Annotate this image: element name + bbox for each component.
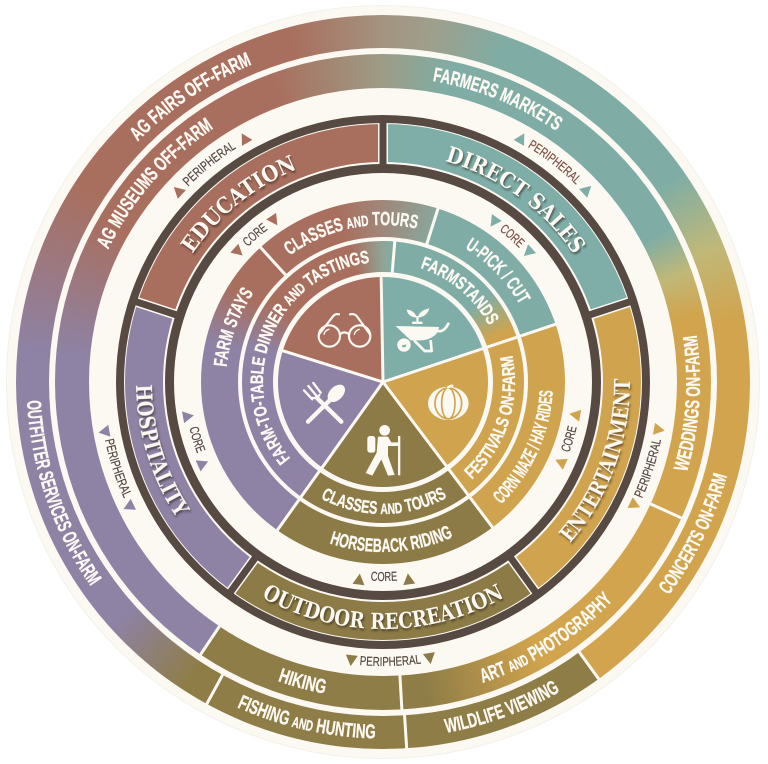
icon: fork and spoon xyxy=(304,381,348,422)
tag: core hospitality: CORE xyxy=(190,426,206,454)
label: ag museums: AG MUSEUMS OFF-FARM xyxy=(97,117,214,250)
label: wildlife viewing: WILDLIFE VIEWING xyxy=(443,681,558,733)
label: concerts: CONCERTS ON-FARM xyxy=(659,472,727,594)
tag: peripheral outdoor: PERIPHERAL xyxy=(360,654,421,666)
label: farm-to-table: FARM-TO-TABLE DINNER AND TASTINGS xyxy=(250,250,369,466)
category titles xyxy=(136,146,632,632)
icon: glasses xyxy=(319,314,370,347)
icon: wheelbarrow with seedling xyxy=(396,308,448,352)
label: corn maze: CORN MAZE / HAY RIDES xyxy=(493,390,553,503)
tag: core outdoor: CORE xyxy=(371,572,398,582)
label: art and photography: ART AND PHOTOGRAPHY xyxy=(481,590,611,684)
cream segment dividers xyxy=(200,208,682,749)
label: farm stays: FARM STAYS xyxy=(214,287,252,366)
panel: core inner band xyxy=(242,241,524,523)
gap around pie xyxy=(273,272,493,492)
thin cream inner outline xyxy=(163,162,603,602)
core label gap xyxy=(174,173,592,591)
label: classes and tours (outdoor): CLASSES AND TOURS xyxy=(322,488,446,514)
pie icons xyxy=(304,308,469,476)
core outer band labels xyxy=(214,212,553,552)
panel: centre pie xyxy=(278,277,488,487)
panel: category band xyxy=(125,124,641,640)
triangles: peripheral (outward) and core (inward) xyxy=(97,130,666,667)
title: outdoor recreation: OUTDOOR RECREATION xyxy=(264,583,504,632)
core inner band labels xyxy=(250,250,516,514)
panel: core outer band xyxy=(201,200,565,564)
peripheral tags xyxy=(105,140,662,666)
dark inner ring xyxy=(165,164,601,600)
second ring labels xyxy=(97,67,700,694)
gap between core bands xyxy=(238,237,528,527)
title: direct sales: DIRECT SALES xyxy=(446,146,588,256)
tag: peripheral hospitality: PERIPHERAL xyxy=(105,438,131,498)
icon: hiker xyxy=(366,425,400,476)
label: farmstands: FARMSTANDS xyxy=(420,256,498,324)
tag: peripheral entertainment: PERIPHERAL xyxy=(634,440,662,498)
label: horseback riding: HORSEBACK RIDING xyxy=(330,526,452,552)
tag: core entertainment: CORE xyxy=(562,426,577,452)
title: hospitality: HOSPITALITY xyxy=(136,384,192,518)
title: education: EDUCATION xyxy=(180,154,296,256)
peripheral label gap xyxy=(89,88,677,676)
tag: core direct sales: CORE xyxy=(500,224,526,248)
label: ag fairs: AG FAIRS OFF-FARM xyxy=(130,52,252,142)
label: hiking: HIKING xyxy=(278,668,326,694)
category band dividers xyxy=(133,119,633,595)
label: classes and tours (education): CLASSES AND TOURS xyxy=(284,212,418,254)
tag: core education: CORE xyxy=(243,222,268,246)
tag: peripheral direct sales: PERIPHERAL xyxy=(528,140,580,185)
label: weddings: WEDDINGS ON-FARM xyxy=(673,336,700,470)
label: u-pick: U-PICK / CUT xyxy=(466,237,532,302)
core tags xyxy=(190,222,577,582)
label: festivals: FESTIVALS ON-FARM xyxy=(464,356,516,480)
title: entertainment: ENTERTAINMENT xyxy=(558,378,632,546)
dark outer ring xyxy=(116,115,650,649)
label: outfitter services: OUTFITTER SERVICES ON-FARM xyxy=(26,400,102,586)
label: farmers markets: FARMERS MARKETS xyxy=(433,67,562,130)
tag: peripheral education: PERIPHERAL xyxy=(182,142,236,186)
thin cream outline of category band xyxy=(124,123,642,641)
icon: pumpkin xyxy=(428,386,469,420)
label: fishing and hunting: FISHING AND HUNTING xyxy=(238,694,375,739)
gap between outer rings xyxy=(49,48,717,716)
panel: second peripheral ring xyxy=(55,54,711,710)
